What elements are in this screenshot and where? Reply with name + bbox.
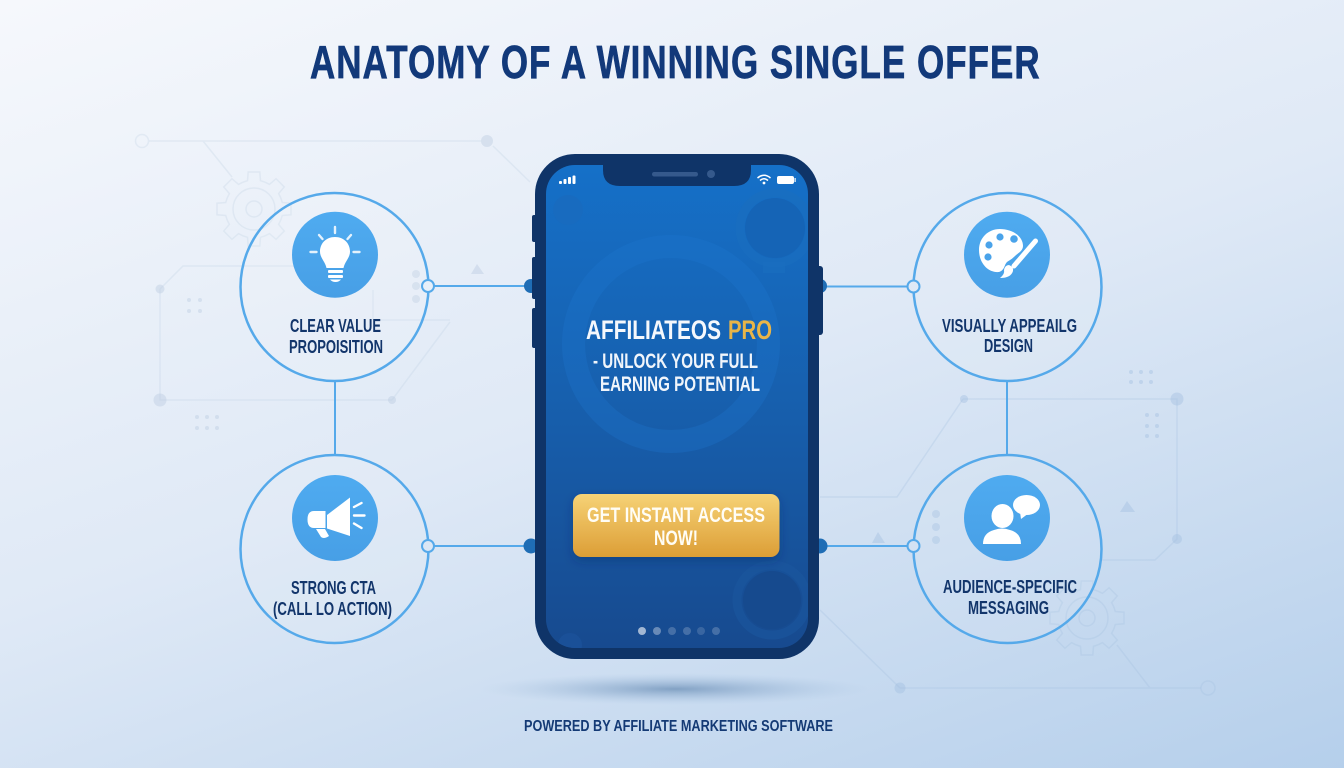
notch xyxy=(603,165,751,186)
connector lines xyxy=(335,286,1007,546)
icon: light bulb xyxy=(292,212,378,298)
label: MESSAGING xyxy=(968,598,1049,618)
headline text xyxy=(586,315,772,396)
title: ANATOMY OF A WINNING SINGLE OFFER xyxy=(310,36,1040,88)
label: (CALL LO ACTION) xyxy=(273,599,392,619)
phone frame xyxy=(535,154,819,659)
label: CLEAR VALUE xyxy=(290,316,381,336)
background circuit pattern: right xyxy=(820,370,1215,695)
phone xyxy=(524,154,828,659)
CTA button xyxy=(573,494,780,557)
label: PROPOISITION xyxy=(289,337,383,357)
label: AUDIENCE-SPECIFIC xyxy=(943,577,1077,597)
node xyxy=(422,280,434,292)
phone shadow xyxy=(480,673,870,705)
panel: strong CTA xyxy=(240,455,434,643)
headline text: PRO xyxy=(728,315,772,345)
icon: palette and brush xyxy=(964,212,1050,298)
pagination dots xyxy=(638,627,720,635)
label xyxy=(943,577,1077,618)
label: VISUALLY APPEAILG xyxy=(942,316,1077,336)
label xyxy=(942,316,1077,356)
node xyxy=(908,280,920,292)
icon: person with speech bubble xyxy=(964,475,1050,561)
speaker and camera xyxy=(652,170,715,178)
label: STRONG CTA xyxy=(291,578,376,598)
headline text: - UNLOCK YOUR FULL xyxy=(593,350,758,373)
node xyxy=(908,540,920,552)
footer text: POWERED BY AFFILIATE MARKETING SOFTWARE xyxy=(524,718,833,735)
status icons xyxy=(559,175,796,184)
icon: megaphone xyxy=(292,475,378,561)
panel: visually appealing design xyxy=(908,193,1102,381)
background circuit pattern: left xyxy=(136,134,530,430)
node xyxy=(422,540,434,552)
panel: audience-specific messaging xyxy=(908,455,1102,643)
headline text: AFFILIATEOS xyxy=(586,315,721,345)
panel: clear value proposition xyxy=(240,193,434,381)
connector dots at phone edge xyxy=(524,279,828,554)
phone screen xyxy=(546,165,810,657)
headline text: EARNING POTENTIAL xyxy=(600,373,760,396)
label xyxy=(289,316,383,357)
side buttons xyxy=(532,215,823,348)
CTA button: NOW! xyxy=(654,527,698,550)
label: DESIGN xyxy=(984,336,1033,356)
label xyxy=(273,578,392,619)
CTA button: GET INSTANT ACCESS xyxy=(587,504,765,527)
